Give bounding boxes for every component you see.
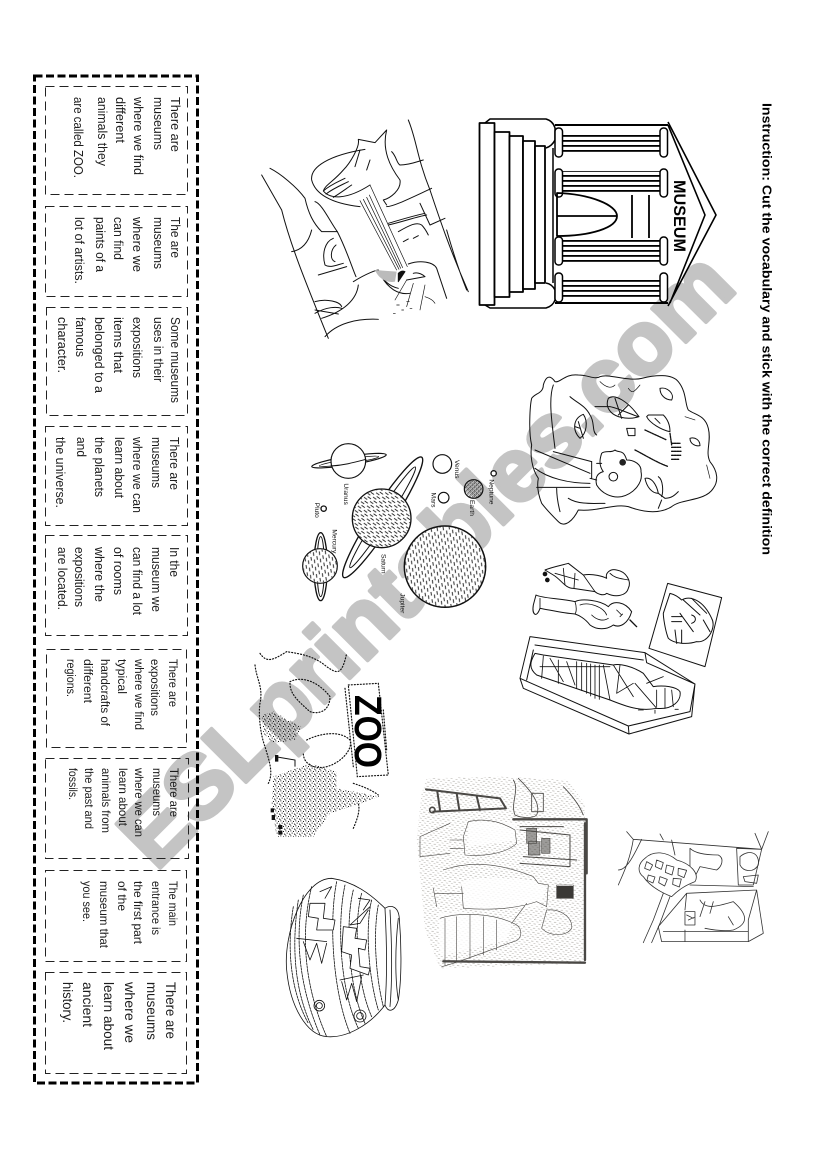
card 6 text: There are xyxy=(166,659,178,707)
card 8 xyxy=(46,870,186,962)
card 4 text: and xyxy=(74,437,89,457)
card 4 text: the universe. xyxy=(53,437,68,508)
illustration: museum display cases xyxy=(618,832,768,943)
illustration: solar system planets: Venus xyxy=(453,460,460,479)
watermark: ESLprintables.com xyxy=(99,233,753,886)
card 5 xyxy=(46,536,188,636)
illustration: zoo sign and crowd xyxy=(255,652,388,837)
illustration: museum gallery visitors painting xyxy=(417,777,587,968)
illustration: solar system planets: Pluto xyxy=(313,503,320,518)
card 7 text: the past and xyxy=(82,768,96,829)
card 2 xyxy=(46,206,188,296)
card 9 text: history. xyxy=(60,982,76,1023)
card 9 text: museums xyxy=(144,982,160,1040)
card 6 xyxy=(46,650,186,748)
card 8 text: museum that xyxy=(97,881,111,949)
card 6 text: typical xyxy=(115,659,127,694)
card 7 text: museums xyxy=(150,768,164,816)
illustration: solar system planets: Uranus xyxy=(342,483,349,505)
card 5 text: where the xyxy=(92,546,107,602)
illustration: solar system planets: Earth xyxy=(468,500,475,516)
card 1 text: museums xyxy=(151,97,166,150)
card 7 text: There are xyxy=(167,768,181,817)
card 3 text: famous xyxy=(73,317,88,357)
card 8 text: The main xyxy=(166,881,180,926)
card 5 text: are located. xyxy=(55,547,70,610)
card 1 text: are called ZOO. xyxy=(71,97,86,178)
card 9 xyxy=(46,972,186,1074)
card 4 xyxy=(46,426,188,526)
card 4 text xyxy=(53,436,182,513)
card 5 text: museum we xyxy=(149,547,164,612)
card 6 text: where we find xyxy=(132,658,144,730)
card 4 text: museums xyxy=(149,437,164,488)
card 2 text: The are xyxy=(168,217,183,258)
card 5 text: of rooms xyxy=(111,547,126,595)
card 3 text: belonged to a xyxy=(92,317,107,394)
illustration: solar system planets: Mercury xyxy=(331,529,338,554)
card 7 text: animals from xyxy=(99,768,113,833)
card 3 text xyxy=(55,317,183,403)
card 3 text: expositions xyxy=(130,317,145,378)
card 5 text xyxy=(55,546,182,615)
card 6 text: handcrafts of xyxy=(98,659,110,727)
card 4 text: There are xyxy=(167,437,182,490)
card 3 text: Some museums xyxy=(168,317,183,403)
panel: cut-out definitions strip xyxy=(34,76,198,1083)
card 1 text: where we find xyxy=(131,96,146,175)
card 2 text: lot of artists. xyxy=(72,217,87,284)
card 3 text: items that xyxy=(111,317,126,373)
card 9 text: ancient xyxy=(80,982,96,1027)
card 6 text: expositions xyxy=(148,659,160,716)
card 9 text: There are xyxy=(163,982,179,1039)
card 1 text: animals they xyxy=(95,97,110,166)
card 6 text xyxy=(64,658,178,730)
card 2 text: where we xyxy=(130,216,145,272)
card 7 xyxy=(46,758,188,858)
card 4 text: the planets xyxy=(92,437,107,497)
card 2 text: paints of a xyxy=(93,217,108,273)
card 8 text: of the xyxy=(115,881,129,911)
illustration: children at mummy exhibit xyxy=(520,563,722,734)
illustration: solar system planets: Jupiter xyxy=(399,593,406,614)
zoo sign lettering: ZOO xyxy=(346,695,388,768)
card 7 text: learn about xyxy=(116,768,130,827)
card 5 text: expositions xyxy=(72,547,87,607)
card 6 text: different xyxy=(81,659,93,704)
illustration: museum building xyxy=(480,119,716,308)
museum label: MUSEUM xyxy=(670,180,689,252)
card 7 text: fossils. xyxy=(66,768,80,800)
card 8 text: the first part xyxy=(131,881,145,945)
card 2 text xyxy=(72,216,183,284)
card 7 text xyxy=(66,767,181,837)
card 2 text: museums xyxy=(151,217,166,269)
card 7 text: where we can xyxy=(132,767,146,837)
card 9 text xyxy=(60,981,179,1050)
card 9 text: learn about xyxy=(101,982,117,1050)
card 9 text: where we xyxy=(122,981,138,1043)
illustration: painter's hand with brush xyxy=(262,120,468,338)
card 1 text xyxy=(71,96,183,178)
illustration: solar system planets: Saturn xyxy=(380,554,387,574)
illustration: fossil dig with girl xyxy=(530,375,717,524)
card 5 text: can find a lot xyxy=(130,547,145,615)
card 4 text: learn about xyxy=(112,437,127,498)
card 8 text: you see. xyxy=(80,881,94,922)
card 3 text: uses in their xyxy=(151,317,166,383)
instruction heading: Instruction: Cut the vocabulary and stick with the correct definition xyxy=(760,103,774,555)
card 8 text: entrance is xyxy=(149,881,163,935)
card 8 text xyxy=(80,881,180,949)
card 1 xyxy=(46,86,188,194)
illustration: solar system planets xyxy=(303,444,496,614)
card 6 text: regions. xyxy=(64,659,76,697)
illustration: decorated clay pot xyxy=(286,878,401,1037)
illustration: solar system planets: Neptune xyxy=(487,479,494,505)
card 3 xyxy=(46,308,188,416)
illustration: solar system planets: Mars xyxy=(429,493,436,508)
card 3 text: character. xyxy=(55,317,70,373)
card 1 text: There are xyxy=(168,97,183,152)
card 2 text: can find xyxy=(111,217,126,260)
card 4 text: where we can xyxy=(130,436,145,513)
card 1 text: different xyxy=(113,97,128,143)
card 5 text: In the xyxy=(167,547,182,577)
